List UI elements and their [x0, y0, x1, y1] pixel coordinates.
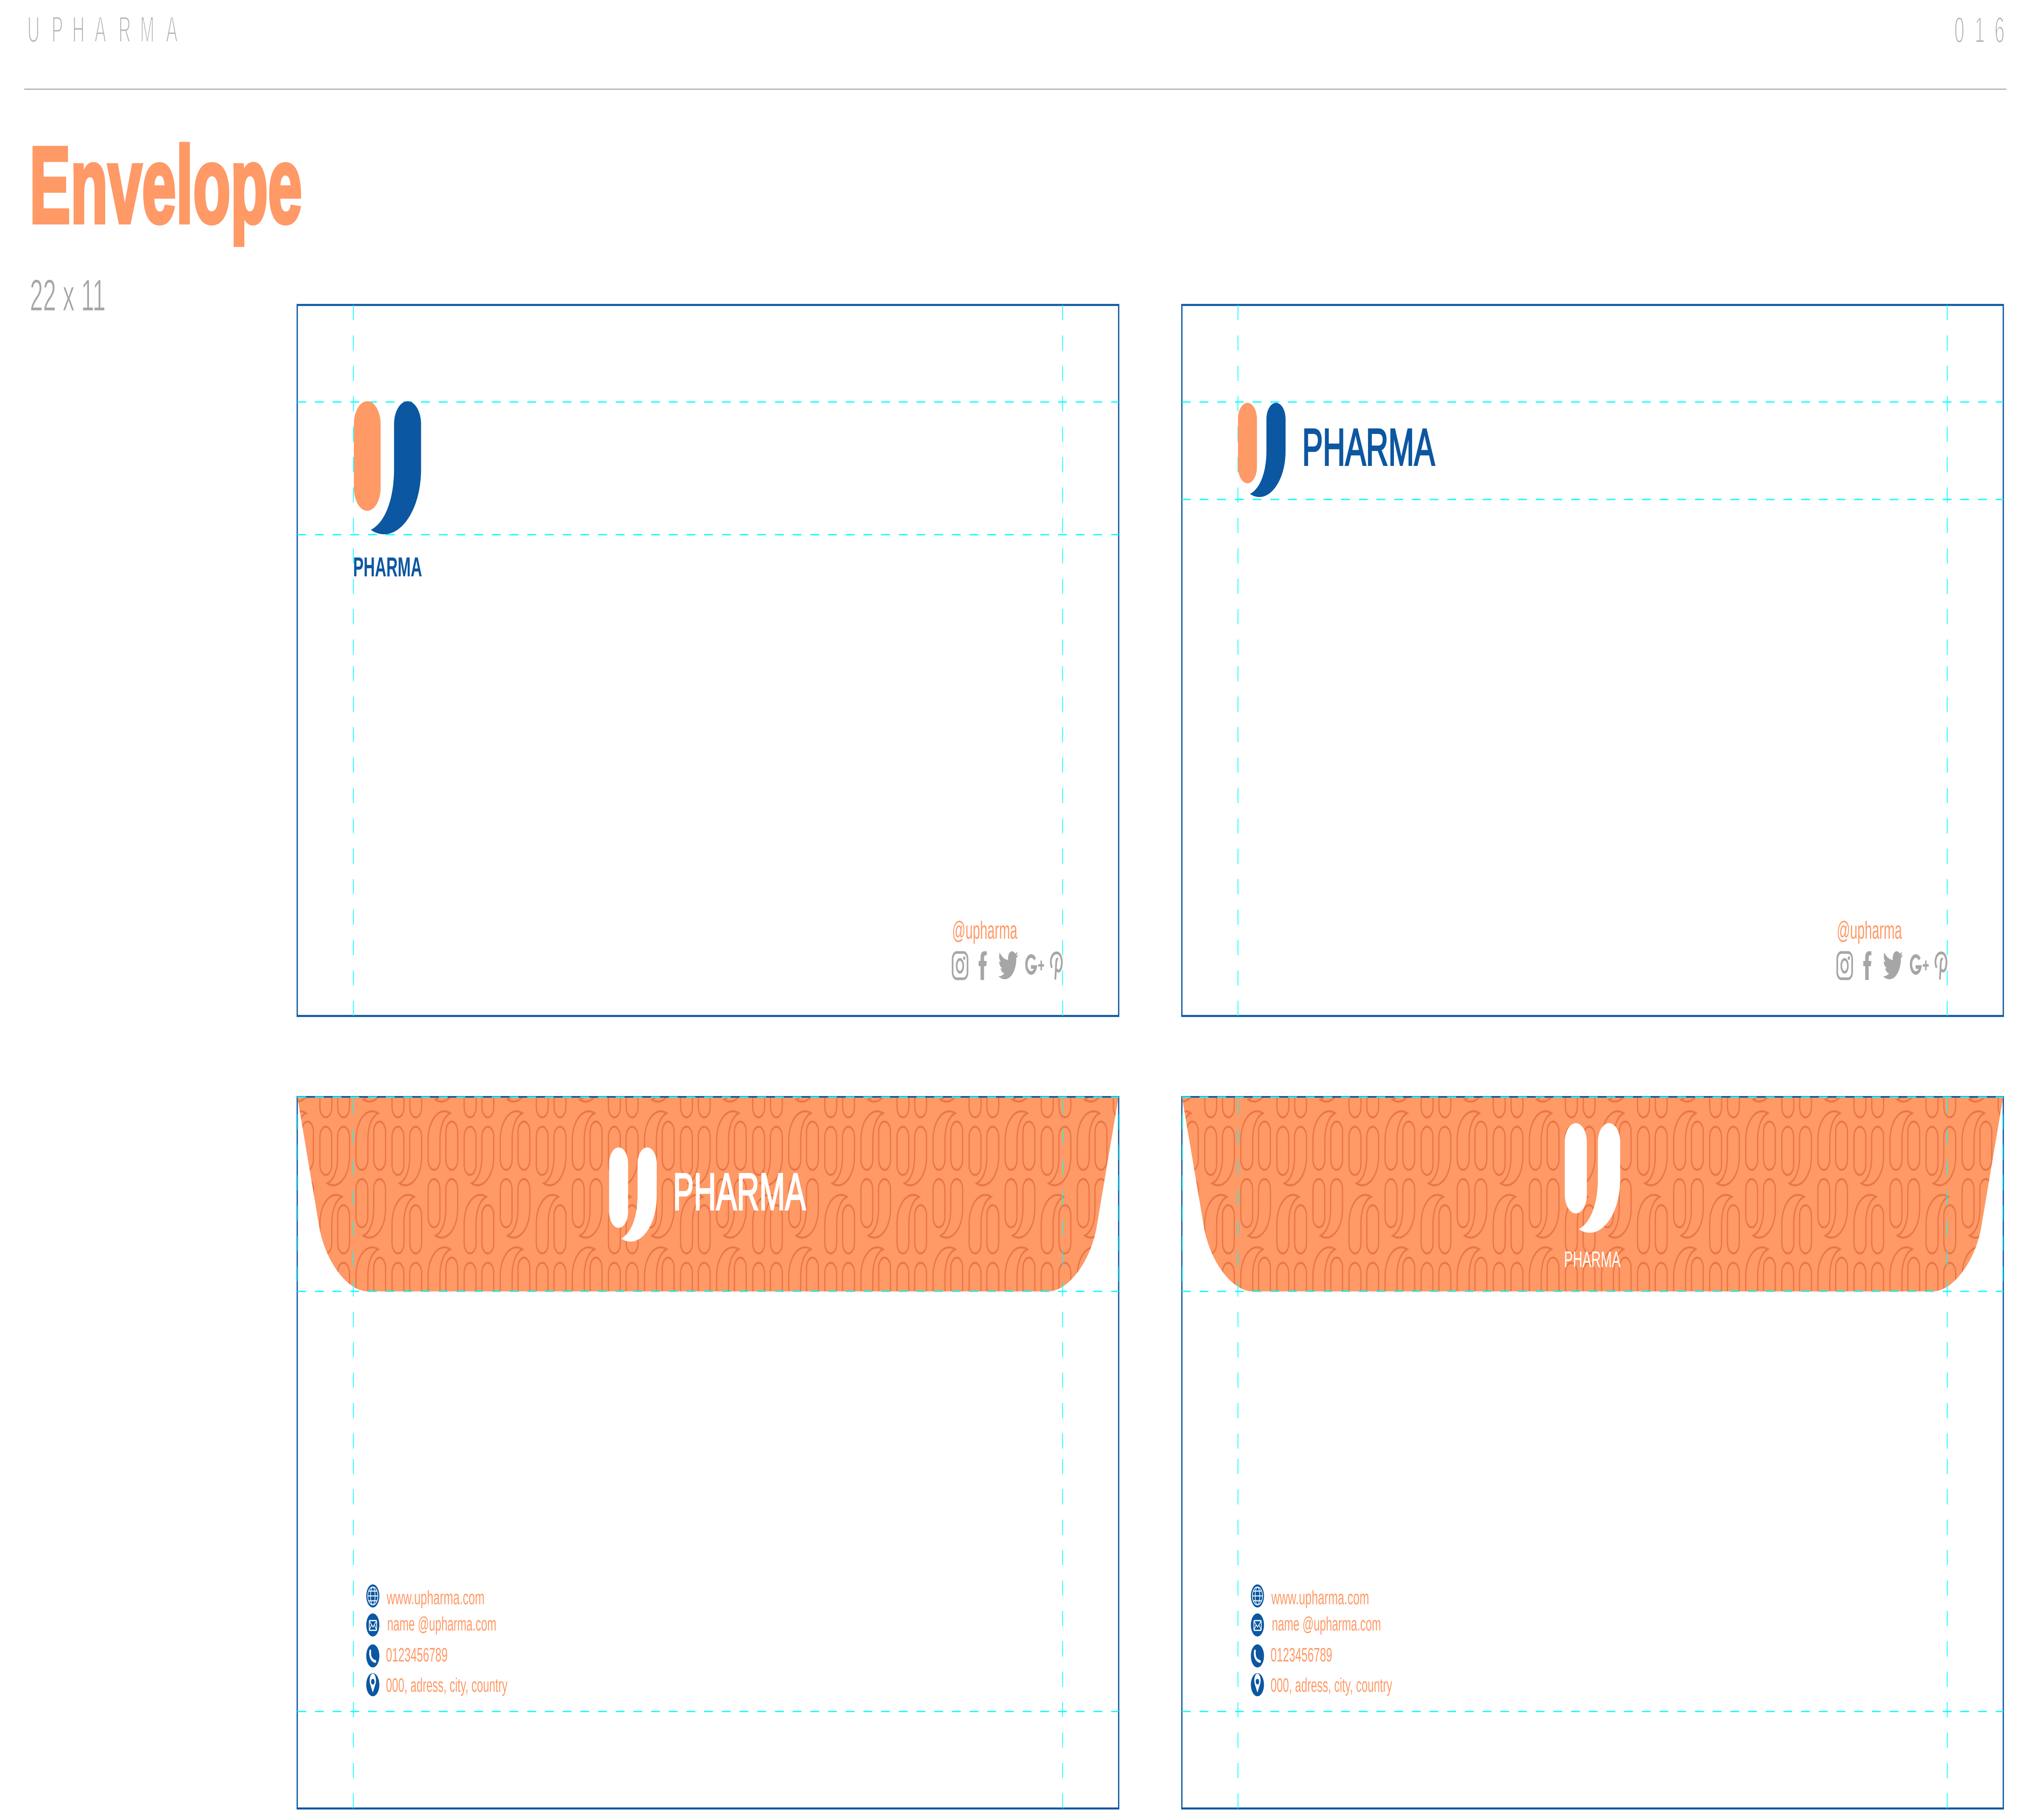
- social handle: @upharma: [1837, 916, 1902, 944]
- logo wordmark: PHARMA: [673, 1163, 806, 1221]
- icon: instagram: [1837, 952, 1852, 979]
- icon: globe: [366, 1585, 379, 1607]
- text: phone: 0123456789: [1271, 1644, 1332, 1666]
- text: address: 000, adress, city, country: [386, 1675, 508, 1696]
- icon: instagram: [953, 952, 967, 979]
- icon: phone: [366, 1644, 379, 1668]
- panel: envelope front, horizontal logo: [1182, 305, 2003, 1016]
- icon: pinterest: [1051, 953, 1062, 980]
- text: address: 000, adress, city, country: [1271, 1675, 1392, 1696]
- logo wordmark: PHARMA: [1302, 418, 1435, 476]
- icon: facebook: [979, 951, 987, 980]
- text: phone: 0123456789: [386, 1644, 448, 1666]
- panel: envelope back, horizontal logo flap: [297, 1097, 1119, 1809]
- social icons: [1837, 951, 1946, 980]
- icon: mail: [1251, 1613, 1264, 1636]
- logo wordmark: PHARMA: [353, 552, 422, 583]
- icon: google plus: [1026, 956, 1044, 973]
- panel: envelope back, stacked logo flap: [1182, 1097, 2003, 1809]
- icon: location pin: [1251, 1673, 1264, 1696]
- header rule: [24, 89, 2006, 90]
- header: brand name: UPHARMA: [27, 9, 178, 50]
- icon: twitter: [998, 951, 1018, 979]
- social icons: [953, 951, 1062, 980]
- subtitle: size: 22 x 11: [30, 271, 106, 320]
- icon: twitter: [1883, 951, 1903, 979]
- logo: stacked U mark: [354, 401, 421, 534]
- text: email: name @upharma.com: [1272, 1614, 1381, 1635]
- logo: horizontal U mark: [1238, 403, 1286, 497]
- contact block: [1251, 1585, 1392, 1696]
- icon: facebook: [1863, 951, 1872, 980]
- text: website: www.upharma.com: [387, 1587, 484, 1608]
- panel: envelope front, stacked logo: [297, 305, 1119, 1016]
- icon: globe: [1251, 1585, 1264, 1607]
- logo: white U mark: [1565, 1123, 1620, 1233]
- icon: google plus: [1911, 956, 1929, 973]
- contact block: [366, 1585, 508, 1696]
- logo: white U mark: [609, 1147, 657, 1242]
- title: Envelope: [30, 125, 302, 246]
- text: website: www.upharma.com: [1271, 1587, 1369, 1608]
- icon: location pin: [366, 1673, 379, 1696]
- social handle: @upharma: [952, 916, 1017, 944]
- icon: mail: [366, 1613, 379, 1636]
- flap with pattern: [1182, 1098, 2003, 1291]
- header: page number: 016: [1954, 10, 2005, 51]
- icon: phone: [1251, 1644, 1264, 1668]
- logo wordmark: PHARMA: [1564, 1247, 1621, 1272]
- flap with pattern: [298, 1098, 1119, 1291]
- text: email: name @upharma.com: [387, 1614, 497, 1635]
- icon: pinterest: [1935, 953, 1946, 980]
